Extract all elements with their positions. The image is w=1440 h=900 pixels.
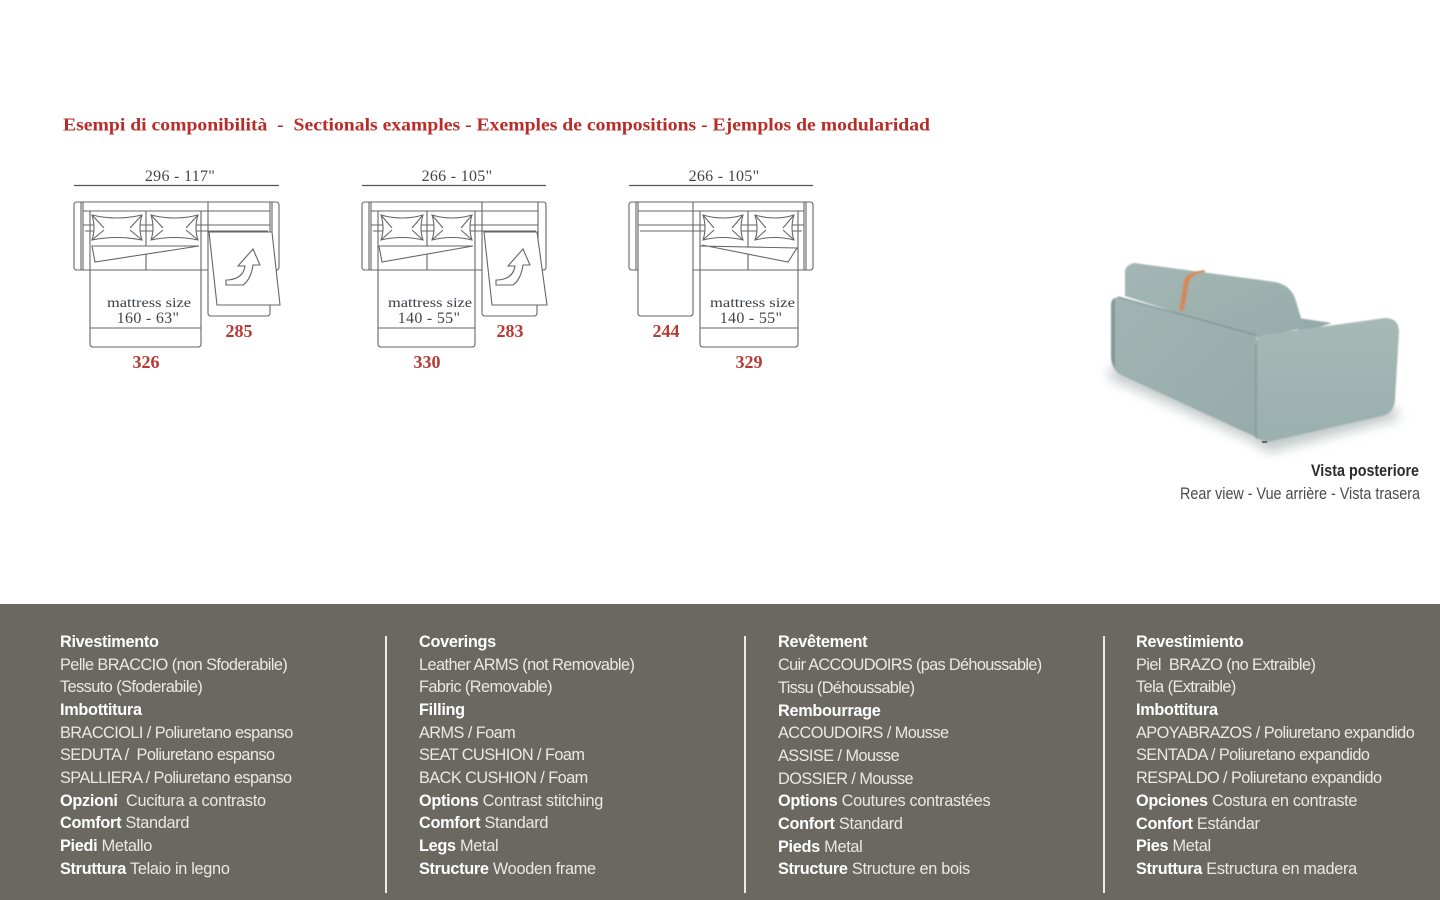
seat glimpse bbox=[1298, 318, 1332, 334]
floor shadow bbox=[1106, 365, 1400, 452]
column: Spanish: Revestimiento bbox=[1136, 633, 1244, 651]
column: Spanish: Pies Metal bbox=[1136, 837, 1211, 855]
mattress size label 1: 160 - 63" bbox=[117, 310, 179, 327]
depth 285: 285 bbox=[226, 321, 252, 341]
arm bbox=[1255, 318, 1399, 442]
column: English: Fabric (Removable) bbox=[419, 678, 552, 696]
sofa rear view image bbox=[1106, 263, 1400, 452]
column: English: BACK CUSHION / Foam bbox=[419, 769, 588, 787]
caption: rear view bbox=[1180, 462, 1421, 503]
column: Spanish bbox=[1136, 633, 1415, 878]
column: Italian: Piedi Metallo bbox=[60, 837, 152, 855]
column: Italian: Tessuto (Sfoderabile) bbox=[60, 678, 202, 696]
mattress size label 1: mattress size bbox=[107, 296, 191, 311]
mattress size label 2: mattress size bbox=[388, 296, 472, 311]
title: Esempi di componibilità - Sectionals examples - Exemples de compositions - Ejemplos de modularidad bbox=[63, 114, 930, 134]
panel: specifications band bbox=[0, 604, 1440, 900]
column: Italian: Opzioni Cucitura a contrasto bbox=[60, 792, 266, 810]
column: Spanish: RESPALDO / Poliuretano expandido bbox=[1136, 769, 1382, 787]
column: Italian bbox=[60, 633, 293, 878]
rear panel bbox=[1111, 297, 1256, 437]
column: Spanish: APOYABRAZOS / Poliuretano expandido bbox=[1136, 724, 1415, 742]
column: Spanish: Piel BRAZO (no Extraible) bbox=[1136, 656, 1315, 674]
column: Italian: Imbottitura bbox=[60, 701, 143, 719]
column: Italian: BRACCIOLI / Poliuretano espanso bbox=[60, 724, 293, 742]
column: French: Tissu (Déhoussable) bbox=[778, 679, 915, 697]
leather strap bbox=[1179, 270, 1205, 311]
column: Spanish: SENTADA / Poliuretano expandido bbox=[1136, 746, 1370, 764]
dimension: overall width 266: 266 - 105" bbox=[422, 168, 492, 185]
column: Italian: Struttura Telaio in legno bbox=[60, 860, 230, 878]
column: French: Confort Standard bbox=[778, 815, 903, 833]
column: English: Comfort Standard bbox=[419, 814, 548, 832]
column: French bbox=[778, 633, 1042, 878]
mattress size label 1 bbox=[107, 296, 191, 327]
column: English: ARMS / Foam bbox=[419, 724, 515, 742]
sofa plan 3 bbox=[629, 202, 813, 347]
column: Spanish: Tela (Extraible) bbox=[1136, 678, 1236, 696]
diagram: sectional 3 bbox=[629, 168, 813, 372]
diagram: sectional 1 bbox=[74, 168, 280, 372]
column: French: DOSSIER / Mousse bbox=[778, 770, 914, 788]
column: English: SEAT CUSHION / Foam bbox=[419, 746, 584, 764]
depth 329: 329 bbox=[736, 352, 762, 372]
column: French: ACCOUDOIRS / Mousse bbox=[778, 724, 949, 742]
column: French: ASSISE / Mousse bbox=[778, 747, 900, 765]
column: Italian: SPALLIERA / Poliuretano espanso bbox=[60, 769, 292, 787]
sofa plan 1 bbox=[74, 202, 280, 347]
column: Spanish: Confort Estándar bbox=[1136, 815, 1261, 833]
column: English: Filling bbox=[419, 701, 465, 719]
mattress size label 2 bbox=[388, 296, 472, 327]
column: English: Structure Wooden frame bbox=[419, 860, 596, 878]
back cushion bbox=[1125, 263, 1304, 338]
column: Italian: Rivestimento bbox=[60, 633, 159, 651]
caption: rear view: Vista posteriore bbox=[1311, 462, 1419, 480]
column: Italian: Comfort Standard bbox=[60, 814, 189, 832]
column: Spanish: Struttura Estructura en madera bbox=[1136, 860, 1358, 878]
column: English: Legs Metal bbox=[419, 837, 498, 855]
column: English: Options Contrast stitching bbox=[419, 792, 603, 810]
mattress size label 2: 140 - 55" bbox=[398, 310, 460, 327]
column: French: Rembourrage bbox=[778, 702, 881, 720]
column: English bbox=[419, 633, 634, 878]
dimension: overall width 296: 296 - 117" bbox=[145, 168, 215, 185]
sofa plan 2 bbox=[362, 202, 547, 347]
diagram: sectional 2 bbox=[362, 168, 547, 372]
dimension: overall width 266: 266 - 105" bbox=[689, 168, 759, 185]
depth 326: 326 bbox=[132, 352, 160, 372]
column: French: Pieds Metal bbox=[778, 838, 862, 856]
column: French: Options Coutures contrastées bbox=[778, 792, 991, 810]
column: English: Leather ARMS (not Removable) bbox=[419, 656, 634, 674]
column: French: Cuir ACCOUDOIRS (pas Déhoussable) bbox=[778, 656, 1042, 674]
column: Spanish: Opciones Costura en contraste bbox=[1136, 792, 1357, 810]
mattress size label 3: mattress size bbox=[710, 296, 795, 311]
depth 283: 283 bbox=[496, 321, 524, 341]
column: Spanish: Imbottitura bbox=[1136, 701, 1219, 719]
depth 244: 244 bbox=[652, 321, 680, 341]
column: English: Coverings bbox=[419, 633, 496, 651]
column: Italian: SEDUTA / Poliuretano espanso bbox=[60, 746, 275, 764]
column: French: Structure Structure en bois bbox=[778, 860, 970, 878]
depth 330: 330 bbox=[414, 352, 440, 372]
mattress size label 3 bbox=[710, 296, 795, 327]
mattress size label 3: 140 - 55" bbox=[720, 310, 782, 327]
column: French: Revêtement bbox=[778, 633, 868, 651]
column: Italian: Pelle BRACCIO (non Sfoderabile) bbox=[60, 656, 287, 674]
foot bbox=[1262, 441, 1267, 443]
